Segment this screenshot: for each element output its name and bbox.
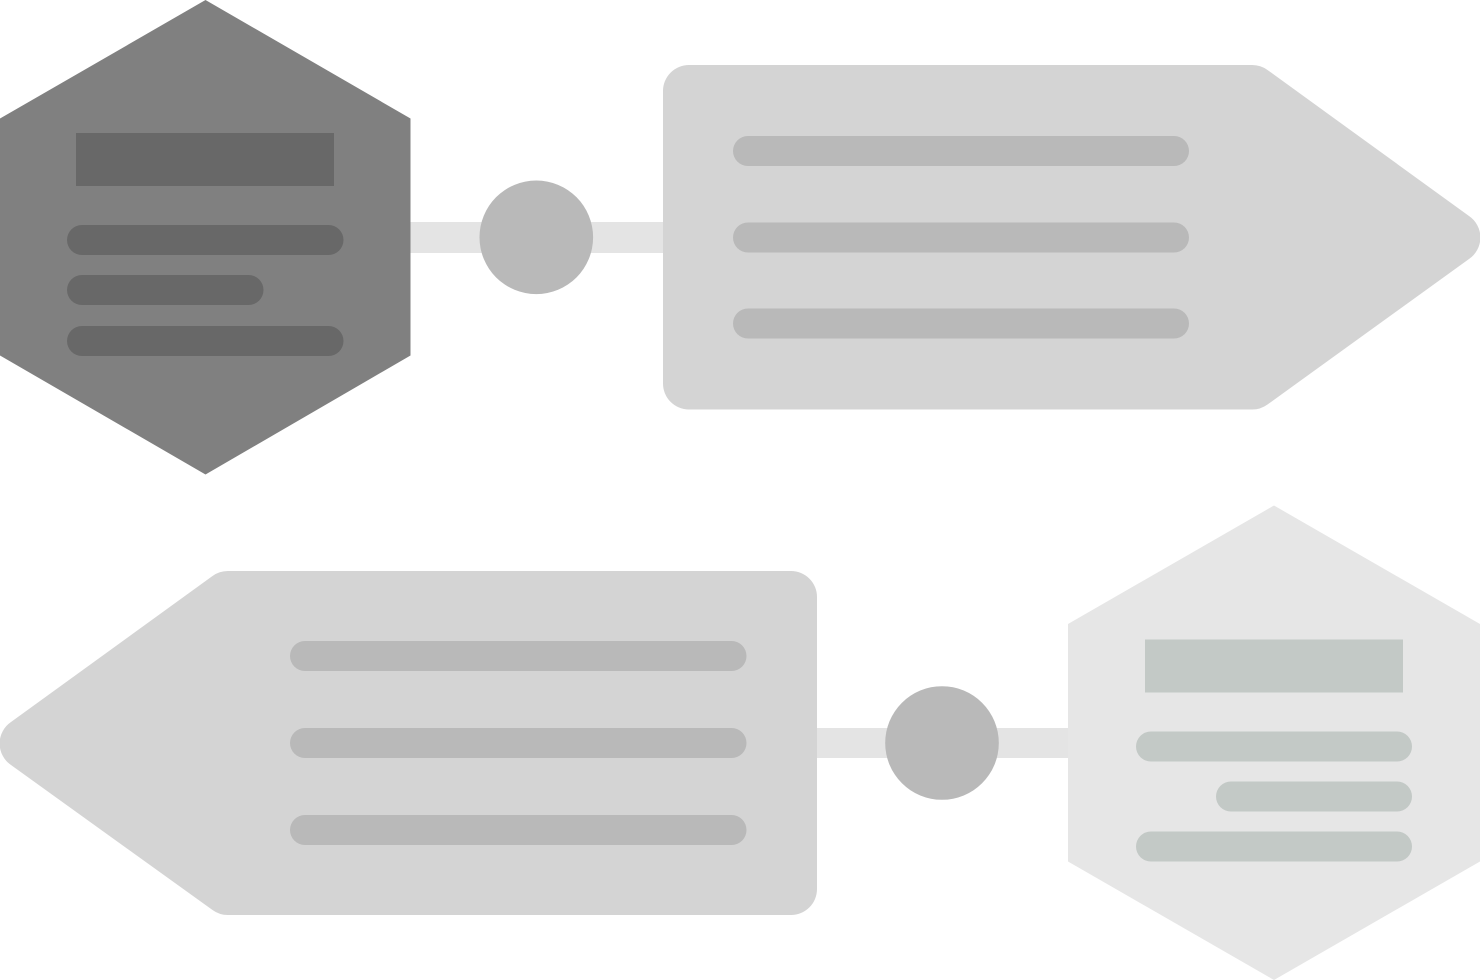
bottom connector bbox=[816, 728, 1069, 758]
hexagon heading block bbox=[76, 133, 334, 186]
arrow text line 2 bbox=[290, 728, 746, 758]
arrow text line 1 bbox=[733, 136, 1189, 166]
arrow text line 1 bbox=[290, 641, 746, 671]
panel: top right arrow bbox=[663, 65, 1480, 410]
panel: bottom right hexagon bbox=[1068, 506, 1480, 980]
arrow text line 2 bbox=[733, 222, 1189, 252]
hexagon text line 3 bbox=[1136, 832, 1412, 862]
hexagon text line 2 bbox=[67, 275, 264, 305]
hexagon text line 3 bbox=[67, 326, 344, 356]
top connector bbox=[410, 222, 663, 253]
bottom node circle bbox=[885, 686, 999, 800]
hexagon text line 2 bbox=[1216, 782, 1412, 812]
top node circle bbox=[480, 180, 593, 294]
hexagon text line 1 bbox=[67, 225, 344, 255]
hexagon heading block bbox=[1145, 640, 1403, 692]
arrow text line 3 bbox=[733, 308, 1189, 338]
panel: top left hexagon bbox=[0, 0, 410, 474]
arrow text line 3 bbox=[290, 815, 746, 845]
panel: bottom left arrow bbox=[0, 571, 817, 915]
hexagon text line 1 bbox=[1136, 732, 1412, 762]
